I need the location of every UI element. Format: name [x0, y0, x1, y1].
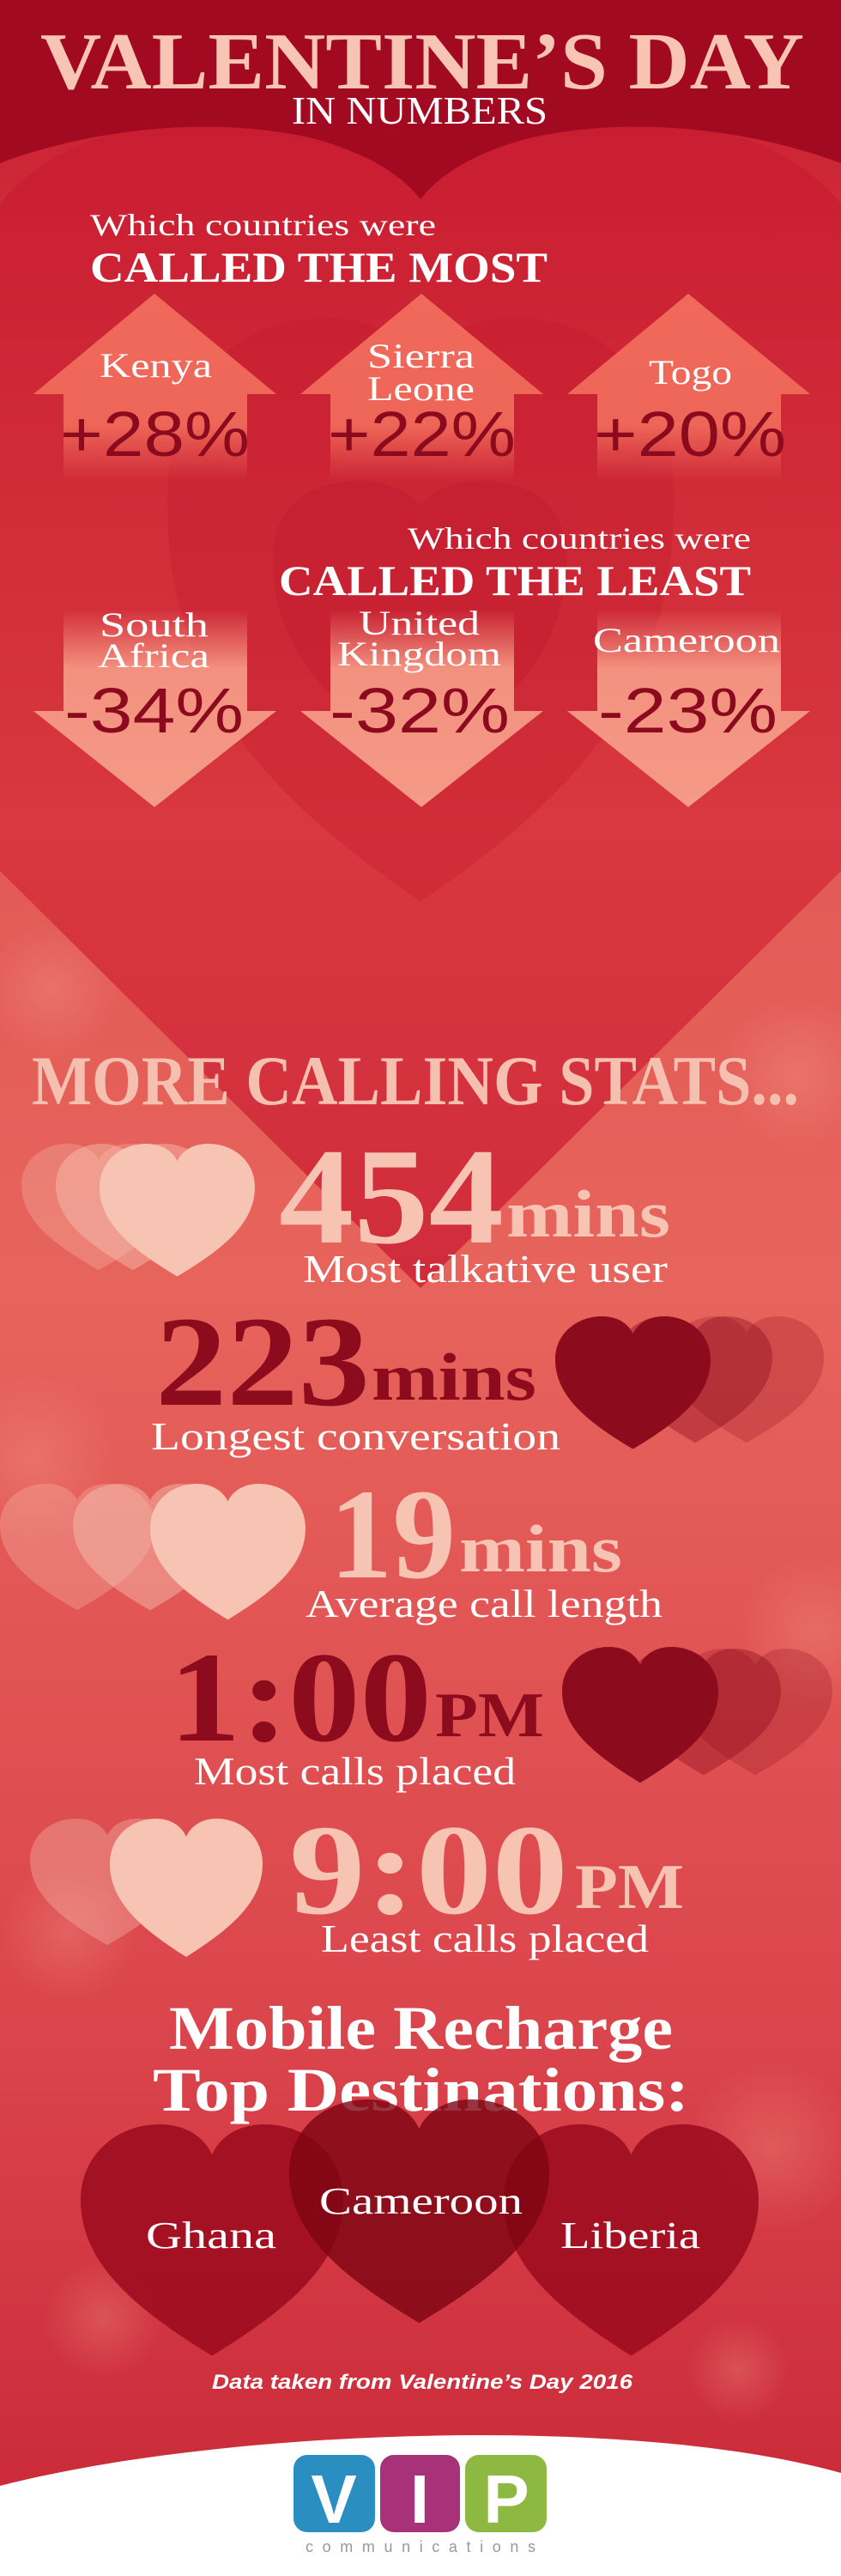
arrow: South Africa: Africa	[98, 636, 209, 675]
big background heart	[0, 123, 841, 1288]
heart: Ghana	[81, 2124, 343, 2356]
arrow: South Africa: -34%	[64, 675, 244, 746]
heading: called the least: Which countries were	[408, 521, 751, 556]
stat: 1:00PM: Most calls placed	[194, 1749, 516, 1793]
stat: 19 mins: mins	[459, 1511, 622, 1586]
heart: Ghana: Ghana	[146, 2215, 276, 2257]
logo: VIP communications: communications	[306, 2538, 535, 2555]
arrow: Sierra Leone: Leone	[367, 369, 475, 408]
arrow: United Kingdom: United	[359, 604, 480, 642]
arrow: Togo: Togo	[649, 353, 732, 392]
arrow: South Africa	[33, 605, 276, 807]
heading: called the most	[90, 208, 548, 291]
stat: 223 mins: 223	[155, 1291, 370, 1433]
destination hearts	[81, 2099, 759, 2356]
stat: 9:00PM: Least calls placed	[321, 1917, 649, 1960]
logo: VIP communications: I	[410, 2461, 429, 2537]
arrow: Sierra Leone: Sierra	[367, 337, 475, 375]
heading: mobile recharge: Top Destinations:	[153, 2056, 689, 2124]
bokeh	[0, 919, 841, 2421]
title: IN NUMBERS	[292, 88, 548, 132]
icon: hearts light	[21, 1144, 255, 1277]
logo: VIP communications	[293, 2455, 547, 2555]
stat: 454 mins: 454	[279, 1120, 504, 1273]
arrow: Cameroon: -23%	[598, 675, 777, 746]
stat: 454 mins: Most talkative user	[303, 1247, 668, 1291]
icon: hearts dark	[555, 1316, 824, 1449]
heart: Liberia	[504, 2124, 759, 2356]
stat: 9:00PM: PM	[575, 1852, 684, 1923]
icon: hearts light	[0, 1484, 306, 1619]
arrow: Kenya: +28%	[60, 398, 250, 470]
stat: 223 mins: Longest conversation	[151, 1414, 560, 1458]
stat: 454 mins: mins	[506, 1176, 670, 1251]
heading: mobile recharge	[153, 1994, 689, 2124]
stat: 1:00PM: PM	[435, 1680, 544, 1751]
top dark band	[0, 0, 841, 199]
arrow: Sierra Leone: +22%	[328, 398, 516, 470]
stat: 223 mins: mins	[372, 1340, 536, 1414]
title: VALENTINE’S DAY	[40, 17, 804, 106]
heading: mobile recharge: Mobile Recharge	[169, 1994, 673, 2063]
heart: Liberia: Liberia	[560, 2215, 700, 2257]
arrow: United Kingdom: Kingdom	[337, 635, 501, 673]
arrow: Togo: +20%	[594, 398, 786, 470]
stat: 1:00PM: 1:00	[169, 1626, 432, 1769]
up arrows	[33, 294, 810, 481]
logo: VIP communications: P	[483, 2461, 529, 2537]
icon: hearts light	[30, 1819, 263, 1957]
stat: 19 mins: Average call length	[306, 1582, 663, 1625]
inner faint hearts	[167, 318, 674, 902]
stat: 19 mins	[0, 1463, 663, 1625]
stat: 9:00PM: 9:00	[289, 1799, 568, 1941]
stat: 223 mins	[151, 1291, 824, 1458]
heart: Cameroon: Cameroon	[319, 2180, 523, 2222]
heading: called the most: Which countries were	[90, 208, 436, 242]
stat: 454 mins	[21, 1120, 670, 1291]
heading: called the least	[279, 521, 751, 605]
arrow: Sierra Leone	[300, 294, 543, 481]
arrow: South Africa: South	[100, 605, 209, 644]
heading: called the least: CALLED THE LEAST	[279, 556, 751, 605]
stat: 19 mins: 19	[330, 1463, 456, 1606]
arrow: Togo	[567, 294, 810, 481]
icon: hearts dark	[562, 1647, 832, 1783]
arrow: Cameroon	[567, 610, 810, 807]
logo: VIP communications: V	[311, 2461, 357, 2537]
arrow: United Kingdom: -32%	[330, 675, 510, 746]
arrow: Kenya: Kenya	[100, 346, 212, 385]
heart: Cameroon	[289, 2099, 549, 2323]
arrow: United Kingdom	[300, 604, 543, 807]
arrow: Cameroon: Cameroon	[593, 621, 780, 659]
heading: called the most: CALLED THE MOST	[90, 243, 548, 291]
white footer	[0, 2435, 841, 2576]
stat: 1:00PM	[169, 1626, 832, 1793]
down arrows	[33, 604, 810, 807]
arrow: Kenya	[33, 294, 276, 481]
stat: 9:00PM	[30, 1799, 684, 1960]
footnote: Data taken from Valentine’s Day 2016	[212, 2371, 633, 2394]
